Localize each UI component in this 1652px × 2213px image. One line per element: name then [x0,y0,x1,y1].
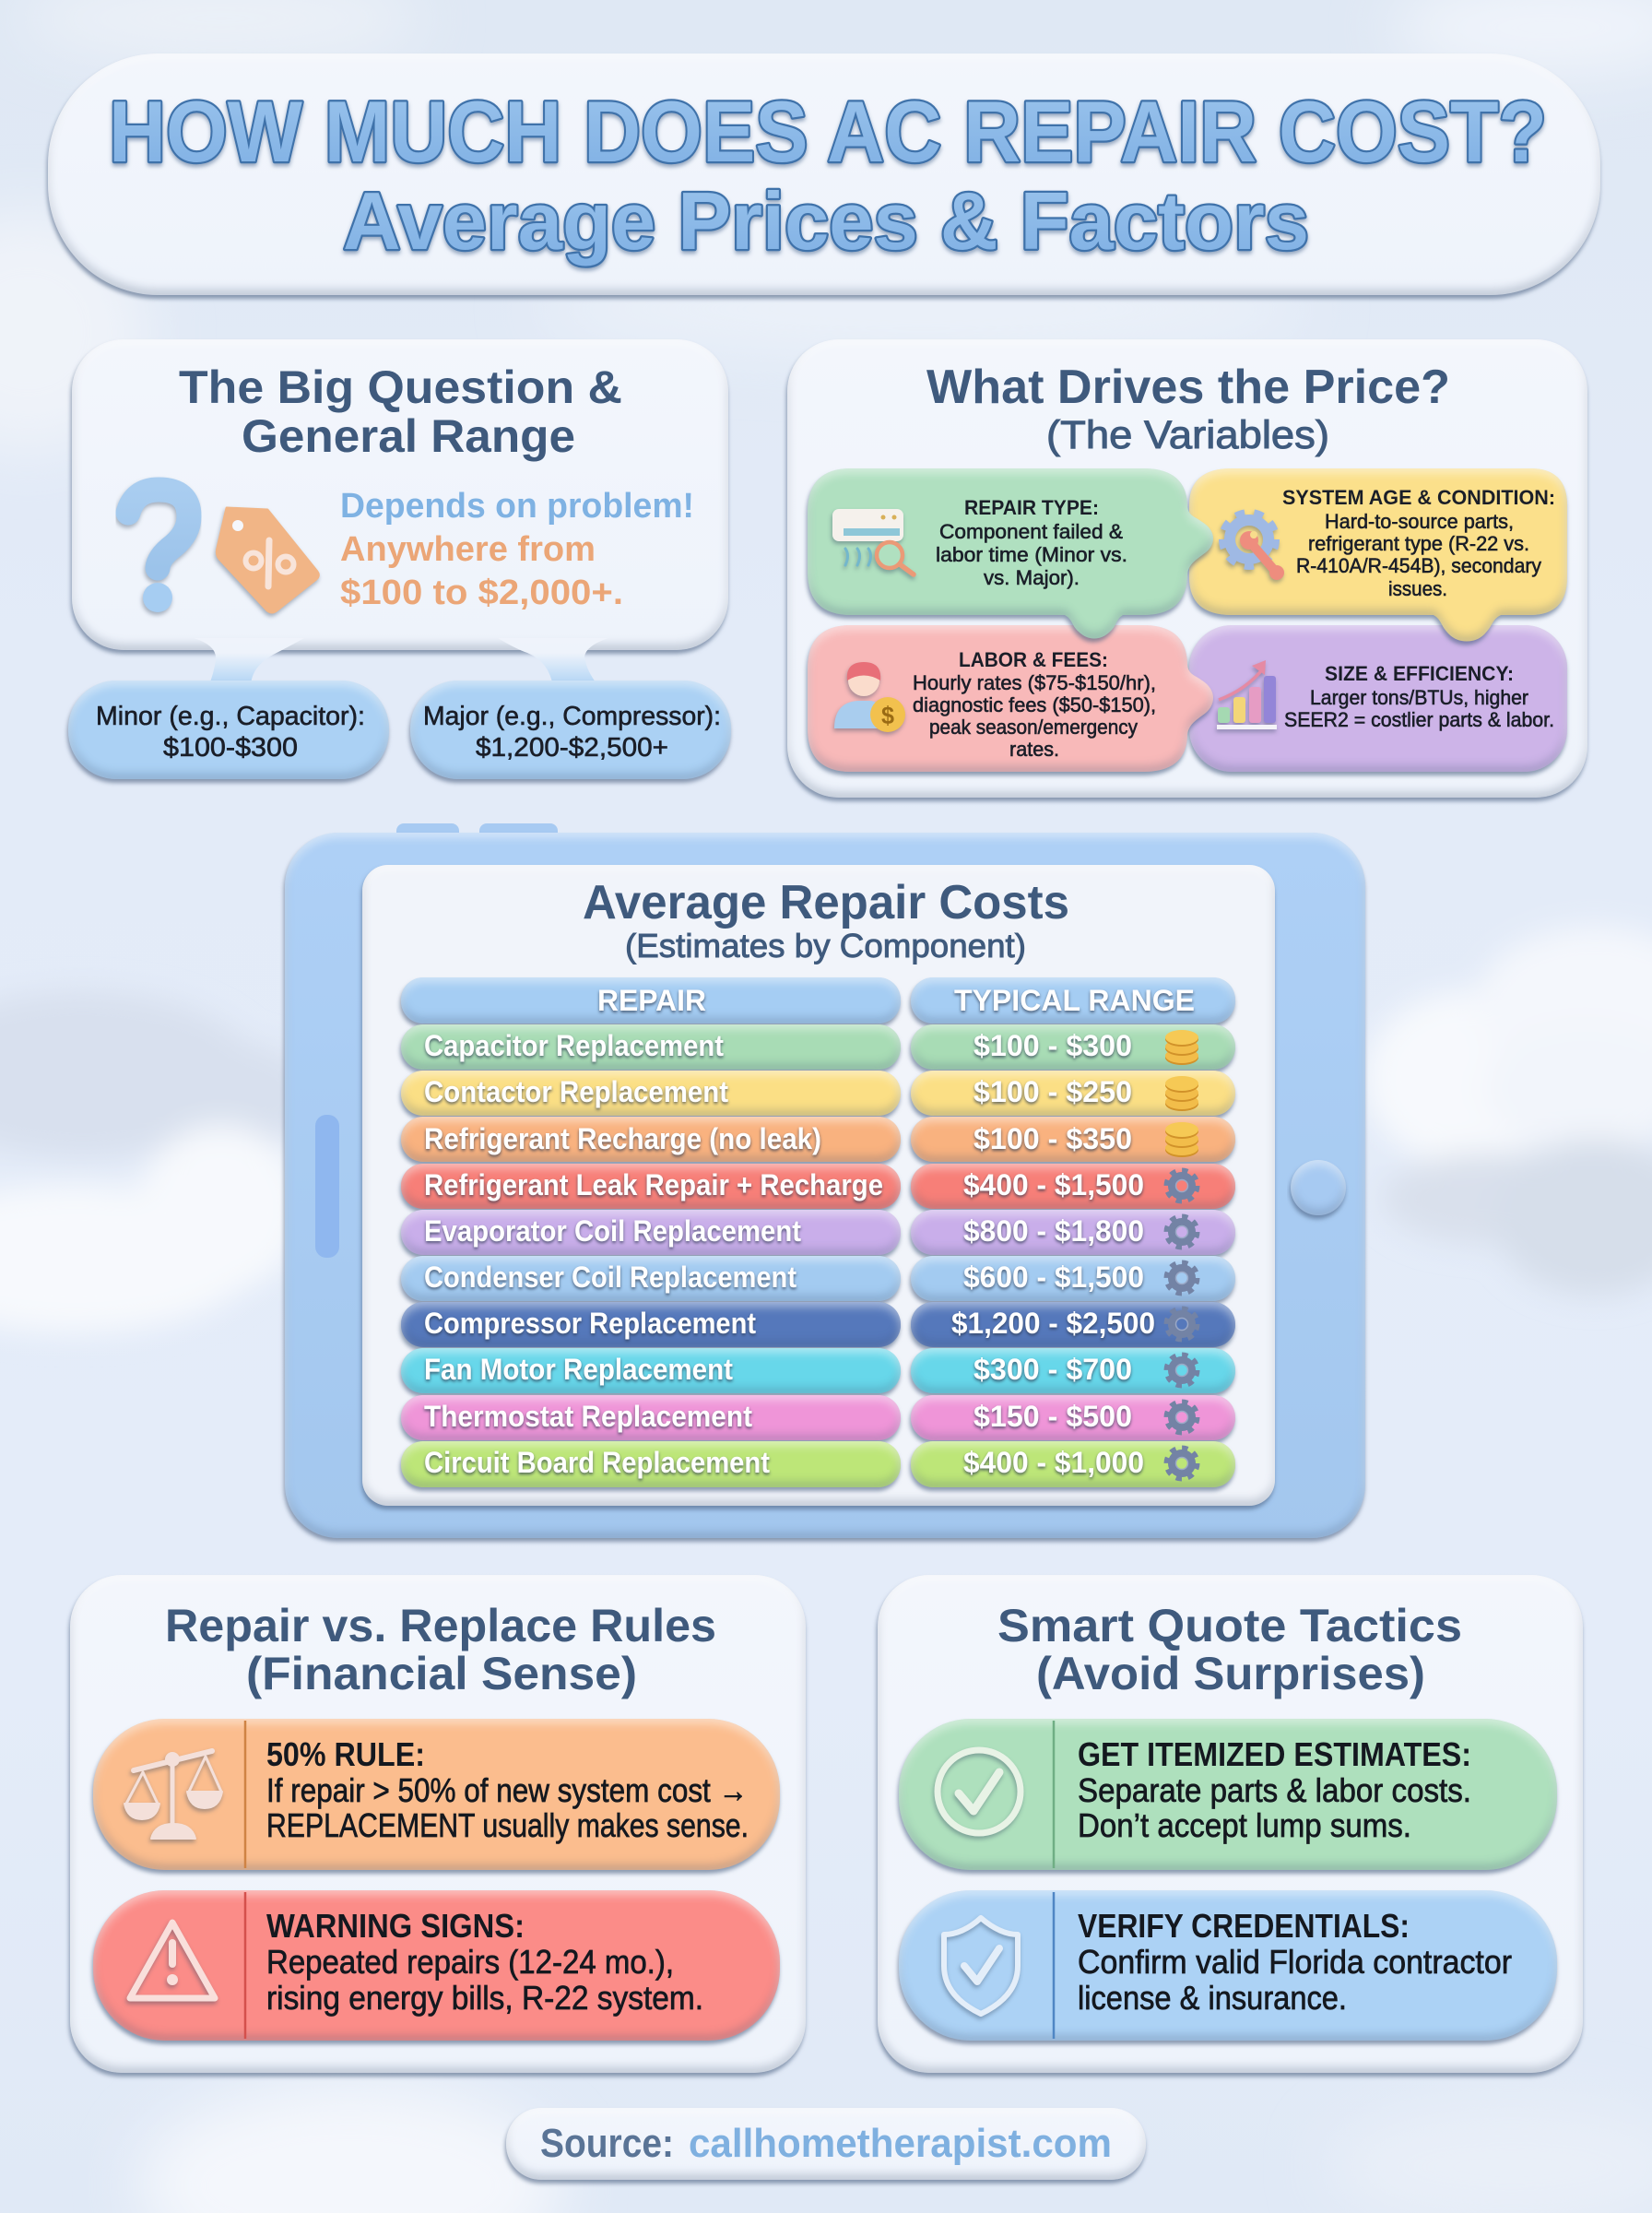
bubble: system age and condition: refrigerant type (R-22 vs. [1308,532,1529,555]
tablet home button [1291,1160,1346,1215]
row: refrigerant leak: Refrigerant Leak Repair + Recharge [424,1168,883,1201]
pill: major repair: Major (e.g., Compressor): [423,702,721,731]
card: itemized estimates: GET ITEMIZED ESTIMATES: [1078,1735,1471,1773]
card: verify credentials: license & insurance. [1078,1979,1347,2017]
card: warning signs: WARNING SIGNS: [266,1907,525,1945]
row: evaporator coil [401,1210,1235,1255]
icon: gear and wrench [1222,513,1284,580]
connector: major stem [498,638,608,687]
heading: big question: The Big Question & [179,361,622,413]
panel: repair vs replace rules [70,1575,806,2073]
heading: general range: General Range [242,410,575,462]
card: itemized estimates [899,1719,1557,1870]
card: warning signs: Repeated repairs (12-24 mo.), [266,1943,674,1981]
heading: financial sense: (Financial Sense) [246,1648,637,1699]
bubble: size and efficiency: SEER2 = costlier parts & labor. [1284,708,1554,731]
bubble: repair type: REPAIR TYPE: [964,496,1099,519]
row: refrigerant leak: $400 - $1,500 [963,1168,1144,1201]
icon: check circle [938,1750,1021,1833]
row: circuit board: Circuit Board Replacement [424,1446,770,1479]
bubble: size and efficiency: SIZE & EFFICIENCY: [1325,662,1514,685]
footer: source pill [506,2108,1146,2180]
card: itemized estimates: Separate parts & labor costs. [1078,1771,1471,1809]
card: 50% rule: If repair > 50% of new system cost → [266,1771,748,1809]
icon: technician with coin [834,662,905,732]
title line 1: HOW MUCH DOES AC REPAIR COST? [109,83,1547,180]
row: circuit board [401,1441,1235,1487]
row: thermostat [401,1395,1235,1440]
icon: question mark [128,490,189,612]
text: depends on problem: Depends on problem! [340,487,694,526]
card: verify credentials: VERIFY CREDENTIALS: [1078,1907,1410,1945]
pill: minor repair: Minor (e.g., Capacitor): [96,702,365,731]
icon: balance scale [124,1751,222,1839]
row: capacitor [401,1024,1235,1070]
pill: minor repair [68,680,389,779]
row: contactor [401,1071,1235,1116]
text: price range: $100 to $2,000+. [340,574,623,612]
tablet body [285,833,1365,1538]
row: condenser coil: Condenser Coil Replacement [424,1260,796,1294]
bubble: labor and fees: diagnostic fees ($50-$150), [913,693,1156,716]
right cloud, bright top then shaded bottom [1364,991,1567,1166]
row: fan motor: Fan Motor Replacement [424,1353,733,1386]
row: circuit board: $400 - $1,000 [963,1446,1144,1479]
bubble: system age and condition: issues. [1388,577,1447,600]
bubble: size and efficiency: Larger tons/BTUs, higher [1310,686,1528,709]
row: contactor: Contactor Replacement [424,1075,728,1108]
table: repair costs [401,977,1235,1487]
row: refrigerant recharge: Refrigerant Recharge (no leak) [424,1122,821,1155]
bubble: labor and fees: rates. [1009,738,1059,761]
footer: source pill: callhometherapist.com [689,2121,1112,2166]
row: refrigerant recharge [401,1117,1235,1162]
pill: minor repair: $100-$300 [163,733,298,763]
icon: percent price tag [217,508,318,612]
row: condenser coil: $600 - $1,500 [963,1260,1144,1294]
panel: smart quote tactics [878,1575,1583,2073]
panel: title banner [48,53,1600,295]
icon: air conditioner with magnifier [832,509,914,574]
pill: major repair [410,680,731,779]
connector: minor stem [194,638,304,687]
row: evaporator coil: $800 - $1,800 [963,1214,1144,1248]
row: evaporator coil: Evaporator Coil Replacement [424,1214,801,1248]
text: anywhere from: Anywhere from [340,530,596,569]
subheading: the variables: (The Variables) [1046,413,1329,457]
icon: bar chart with arrow [1217,660,1277,729]
footer: source pill: Source: [540,2121,674,2166]
bubble: system age and condition: SYSTEM AGE & CONDITION: [1282,486,1555,509]
bubble: system age and condition: Hard-to-source parts, [1325,510,1514,533]
table header: TYPICAL RANGE [954,984,1195,1017]
bubble: repair type [808,468,1213,638]
card: itemized estimates: Don’t accept lump sums. [1078,1806,1411,1844]
bubble: system age and condition: R-410A/R-454B), secondary [1296,554,1542,577]
bubble: size and efficiency [1189,625,1567,772]
row: capacitor: $100 - $300 [974,1029,1132,1062]
heading: what drives the price: What Drives the Price? [926,361,1450,414]
row: thermostat: $150 - $500 [974,1400,1132,1433]
heading: smart quote tactics: Smart Quote Tactics [997,1600,1462,1651]
row: condenser coil [401,1256,1235,1301]
bubble: labor and fees: peak season/emergency [929,716,1139,739]
tablet screen [362,865,1275,1506]
table header: REPAIR [597,984,706,1017]
row: refrigerant leak [401,1164,1235,1209]
bubble: labor and fees: LABOR & FEES: [959,648,1108,671]
row: capacitor: Capacitor Replacement [424,1029,724,1062]
card: warning signs [93,1890,780,2041]
panel: what drives the price [787,339,1587,798]
bubble: system age and condition [1189,468,1567,642]
row: fan motor [401,1348,1235,1393]
row: contactor: $100 - $250 [974,1075,1132,1108]
icon: warning triangle [130,1923,215,1998]
icon: technician with coin: $ [881,702,894,729]
tablet side button [315,1115,339,1258]
subheading: estimates by component: (Estimates by Component) [625,927,1026,964]
row: fan motor: $300 - $700 [974,1353,1132,1386]
card: 50% rule [93,1719,780,1870]
tablet top buttons [396,823,558,842]
heading: avoid surprises: (Avoid Surprises) [1036,1648,1425,1699]
row: compressor [401,1302,1235,1347]
icon: shield with check [944,1918,1018,2014]
row: thermostat: Thermostat Replacement [424,1400,752,1433]
title line 2: Average Prices & Factors [343,175,1309,266]
row: refrigerant recharge: $100 - $350 [974,1122,1132,1155]
left cloud, shaded top then bright bottom [0,991,258,1157]
card: verify credentials: Confirm valid Florida contractor [1078,1943,1512,1981]
pill: major repair: $1,200-$2,500+ [476,733,668,763]
card: warning signs: rising energy bills, R-22 system. [266,1979,703,2017]
bubble: repair type: Component failed & [939,520,1123,543]
row: compressor: Compressor Replacement [424,1307,756,1340]
card: verify credentials [899,1890,1557,2041]
table header [401,977,1235,1024]
panel: tablet with average repair costs [285,823,1365,1538]
bubble: labor and fees: Hourly rates ($75-$150/hr), [913,671,1156,694]
bubble: labor and fees [808,625,1213,772]
heading: average repair costs: Average Repair Costs [583,876,1069,929]
card: 50% rule: REPLACEMENT usually makes sense. [266,1806,749,1844]
panel: the big question and general range [72,339,728,687]
row: compressor: $1,200 - $2,500 [951,1307,1155,1340]
bubble: repair type: vs. Major). [984,566,1080,589]
card: 50% rule: 50% RULE: [266,1735,425,1773]
heading: repair vs replace: Repair vs. Replace Rules [165,1600,716,1651]
bubble: repair type: labor time (Minor vs. [936,543,1127,566]
